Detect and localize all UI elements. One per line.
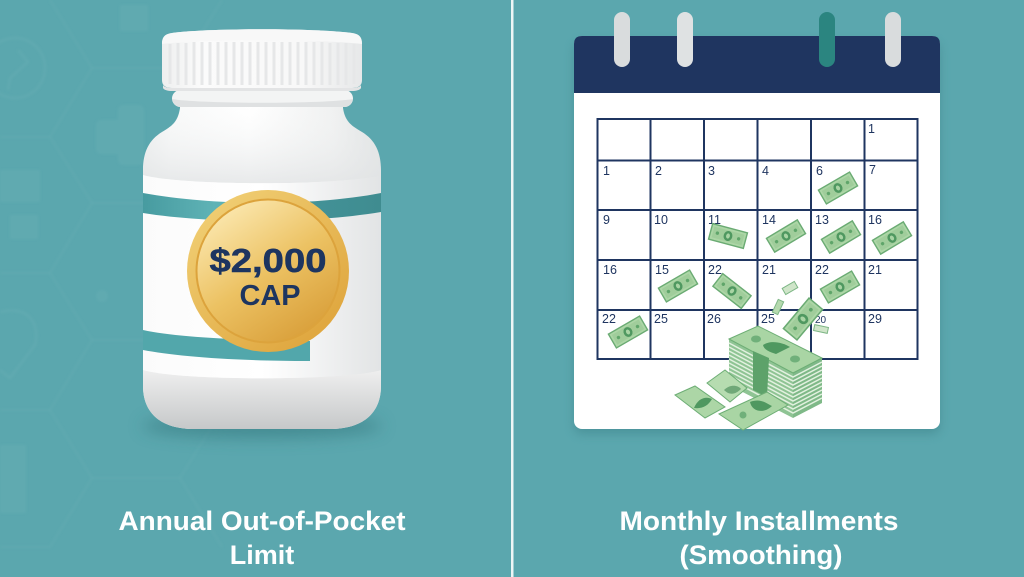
calendar dates: 16 xyxy=(868,213,882,227)
bottle shoulder shading xyxy=(143,106,381,183)
calendar grid xyxy=(598,119,918,359)
paper band xyxy=(763,342,790,354)
calendar page xyxy=(574,36,940,429)
loose bill left xyxy=(675,386,725,418)
calendar dates: 14 xyxy=(762,213,776,227)
binding ring 3 xyxy=(819,12,835,67)
background pattern: hexagons and faint medical icons xyxy=(0,0,222,547)
calendar dates: 4 xyxy=(762,164,769,178)
left caption second line: Limit xyxy=(230,540,294,570)
calendar dates: 25 xyxy=(761,312,775,326)
calendar dates: 10 xyxy=(654,213,668,227)
stack side faces xyxy=(729,339,793,418)
falling dollar bills xyxy=(608,172,912,348)
left caption: Annual Out-of-Pocket xyxy=(118,506,406,536)
calendar dates: 11 xyxy=(708,213,721,227)
loose bill middle xyxy=(707,370,747,402)
calendar dates: 7 xyxy=(869,163,876,177)
calendar dates: 1 xyxy=(868,122,875,136)
calendar dates: 20 xyxy=(815,315,827,326)
calendar dates: 21 xyxy=(868,263,882,277)
pill bottle xyxy=(143,29,381,429)
cap ridges xyxy=(170,42,354,85)
calendar dates: 9 xyxy=(603,213,610,227)
calendar dates: 21 xyxy=(762,263,776,277)
bottle body xyxy=(143,100,381,429)
calendar dates: 13 xyxy=(815,213,829,227)
loose bill front xyxy=(719,392,788,430)
calendar dates: 22 xyxy=(815,263,829,277)
cap lower edge xyxy=(163,85,361,91)
divider line xyxy=(511,0,514,577)
cap xyxy=(162,29,362,88)
calendar dates: 6 xyxy=(816,164,823,178)
stack layers xyxy=(729,343,822,413)
bottle ground shadow xyxy=(142,414,382,438)
binding ring 1 xyxy=(614,12,630,67)
calendar header xyxy=(574,36,940,93)
lower teal band xyxy=(143,330,310,361)
calendar dates: 29 xyxy=(868,312,882,326)
binding ring 2 xyxy=(677,12,693,67)
cap top rim xyxy=(162,29,362,44)
calendar dates: 2 xyxy=(655,164,662,178)
coin amount: $2,000 xyxy=(210,242,326,279)
stack top note xyxy=(729,326,822,373)
right caption second line: (Smoothing) xyxy=(680,540,842,570)
calendar dates: 25 xyxy=(654,312,668,326)
calendar dates: 1 xyxy=(603,164,610,178)
bottle base shading xyxy=(143,370,381,429)
stack of cash xyxy=(675,326,822,430)
calendar dates: 22 xyxy=(708,263,722,277)
coin caption: CAP xyxy=(240,280,300,312)
calendar shadow xyxy=(574,42,940,434)
calendar xyxy=(574,12,940,429)
calendar dates xyxy=(602,122,882,326)
white label xyxy=(143,175,381,378)
calendar dates: 22 xyxy=(602,312,616,326)
gold coin xyxy=(187,190,349,352)
binding ring 4 xyxy=(885,12,901,67)
calendar dates: 16 xyxy=(603,263,617,277)
upper teal band xyxy=(143,193,381,221)
neck ring xyxy=(172,90,353,107)
calendar dates: 3 xyxy=(708,164,715,178)
faint pale blocks xyxy=(0,5,148,513)
right caption: Monthly Installments xyxy=(620,506,898,536)
calendar dates: 15 xyxy=(655,263,669,277)
calendar dates: 26 xyxy=(707,312,721,326)
